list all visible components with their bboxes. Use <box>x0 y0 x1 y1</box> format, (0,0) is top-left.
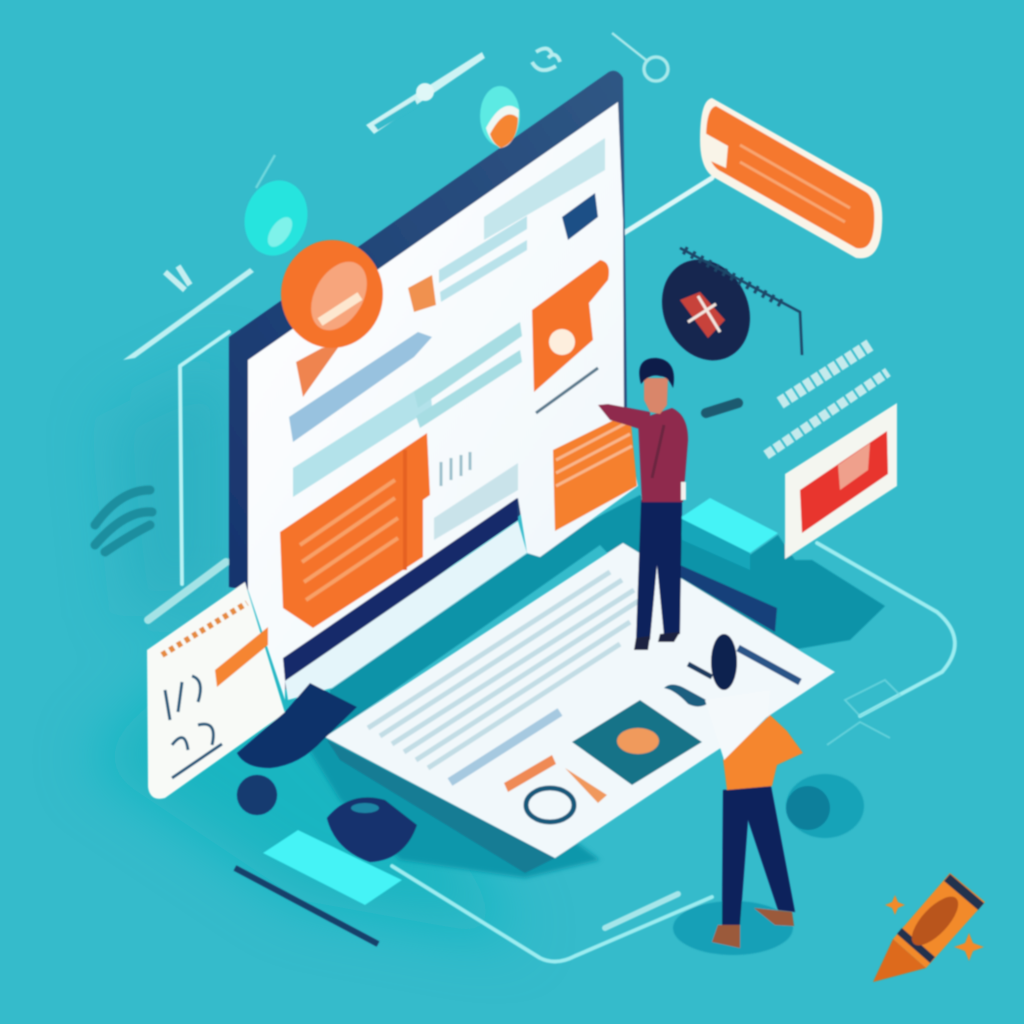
monitor screen <box>248 102 638 700</box>
legs <box>636 500 682 640</box>
bubble inner oval <box>300 252 378 340</box>
crayon logo <box>873 873 985 982</box>
top right ring and line <box>612 33 668 81</box>
card sheet <box>147 582 285 799</box>
shoes <box>712 908 794 948</box>
monitor <box>229 71 638 700</box>
image card circle <box>549 329 575 355</box>
cyan tablet <box>263 830 402 905</box>
paper blue bar <box>450 712 560 782</box>
paper orange bar <box>504 755 556 792</box>
bottom streak <box>605 894 678 928</box>
torso <box>638 408 688 502</box>
connector: bottom loop <box>392 866 712 962</box>
underline <box>536 368 598 413</box>
bottom paper <box>325 543 835 873</box>
paper dark mark <box>664 684 710 707</box>
connector lines <box>148 178 955 962</box>
crayon tip <box>873 939 926 982</box>
small text block <box>434 463 518 540</box>
shoes <box>634 632 680 650</box>
thin header lines <box>439 216 527 302</box>
connector: left frame <box>180 332 229 584</box>
watch <box>681 482 686 500</box>
wide pale bar <box>293 381 432 497</box>
bubble bar <box>320 296 360 322</box>
sparkle left <box>885 895 905 915</box>
neck and face <box>644 378 668 414</box>
paper sheet <box>325 543 835 858</box>
small dark dash <box>706 403 738 413</box>
cyan balloon <box>236 155 316 263</box>
legs <box>722 786 795 925</box>
small orange icon <box>408 275 436 312</box>
small icon top <box>532 48 560 70</box>
card orange bar <box>215 627 268 687</box>
floating pen left <box>123 268 254 360</box>
orange image card <box>532 260 609 392</box>
arm <box>688 664 712 677</box>
shirt fold <box>652 425 664 478</box>
left base streak <box>148 562 226 620</box>
card dashes <box>162 603 247 655</box>
speech bubble <box>281 240 383 397</box>
red image card <box>785 403 897 559</box>
paper orange wedge <box>565 768 607 803</box>
shadow under standing man <box>673 901 793 955</box>
shadow around round icon <box>786 774 864 838</box>
orange article card <box>280 433 430 628</box>
connector: monitor to banner <box>624 178 712 233</box>
orange card on screen <box>553 412 637 531</box>
white collar over paper <box>705 690 770 760</box>
paper circle icon <box>526 788 574 822</box>
shadow under paper <box>300 715 600 878</box>
orange shirt <box>723 715 803 790</box>
floating tool top <box>366 52 485 134</box>
arm <box>598 404 650 432</box>
crayon body <box>893 873 985 968</box>
floating text lines right <box>766 345 888 455</box>
small bar chart <box>441 452 470 486</box>
crayon label oval <box>904 889 966 953</box>
standing man pointing <box>598 358 688 650</box>
dark circular badge <box>646 245 802 375</box>
crayon top band <box>944 874 984 910</box>
thumbnail orange shape <box>617 728 659 754</box>
navy tile <box>562 193 598 240</box>
card glyph marks <box>165 676 222 778</box>
hair <box>639 358 674 388</box>
monitor frame <box>229 71 627 690</box>
cyan platform <box>680 498 778 570</box>
small glyph near pen <box>165 266 190 290</box>
monitor base <box>285 521 527 700</box>
paper dark bar <box>738 648 800 682</box>
floor shadows <box>300 495 885 955</box>
standing man from behind <box>688 634 803 948</box>
bubble tail <box>296 345 340 397</box>
dark base blob <box>237 683 357 768</box>
paper image thumbnail <box>572 700 702 785</box>
soft background tint <box>90 360 520 940</box>
paper edge <box>327 740 555 873</box>
paper dark strip <box>680 565 777 632</box>
orange teal capsule <box>480 86 520 148</box>
connector: right loop <box>817 543 955 716</box>
left swirl icon <box>95 490 152 552</box>
dark device <box>327 797 417 862</box>
faint outlined device right <box>827 680 900 745</box>
dark ball <box>237 775 277 815</box>
dark stick <box>235 868 378 944</box>
dark round icon right <box>786 786 830 830</box>
monitor lower bezel <box>283 498 518 680</box>
crayon lower band <box>897 928 935 963</box>
paired pale lines <box>414 322 522 428</box>
paper text lines <box>368 572 640 768</box>
head <box>711 634 737 690</box>
blue headline bar <box>289 332 432 442</box>
sparkle right <box>954 933 984 961</box>
top right orange banner <box>700 98 882 258</box>
shadow between monitor and paper <box>330 495 885 735</box>
left floating card <box>147 582 285 799</box>
top header bar <box>484 138 605 240</box>
bubble disc <box>281 240 383 348</box>
